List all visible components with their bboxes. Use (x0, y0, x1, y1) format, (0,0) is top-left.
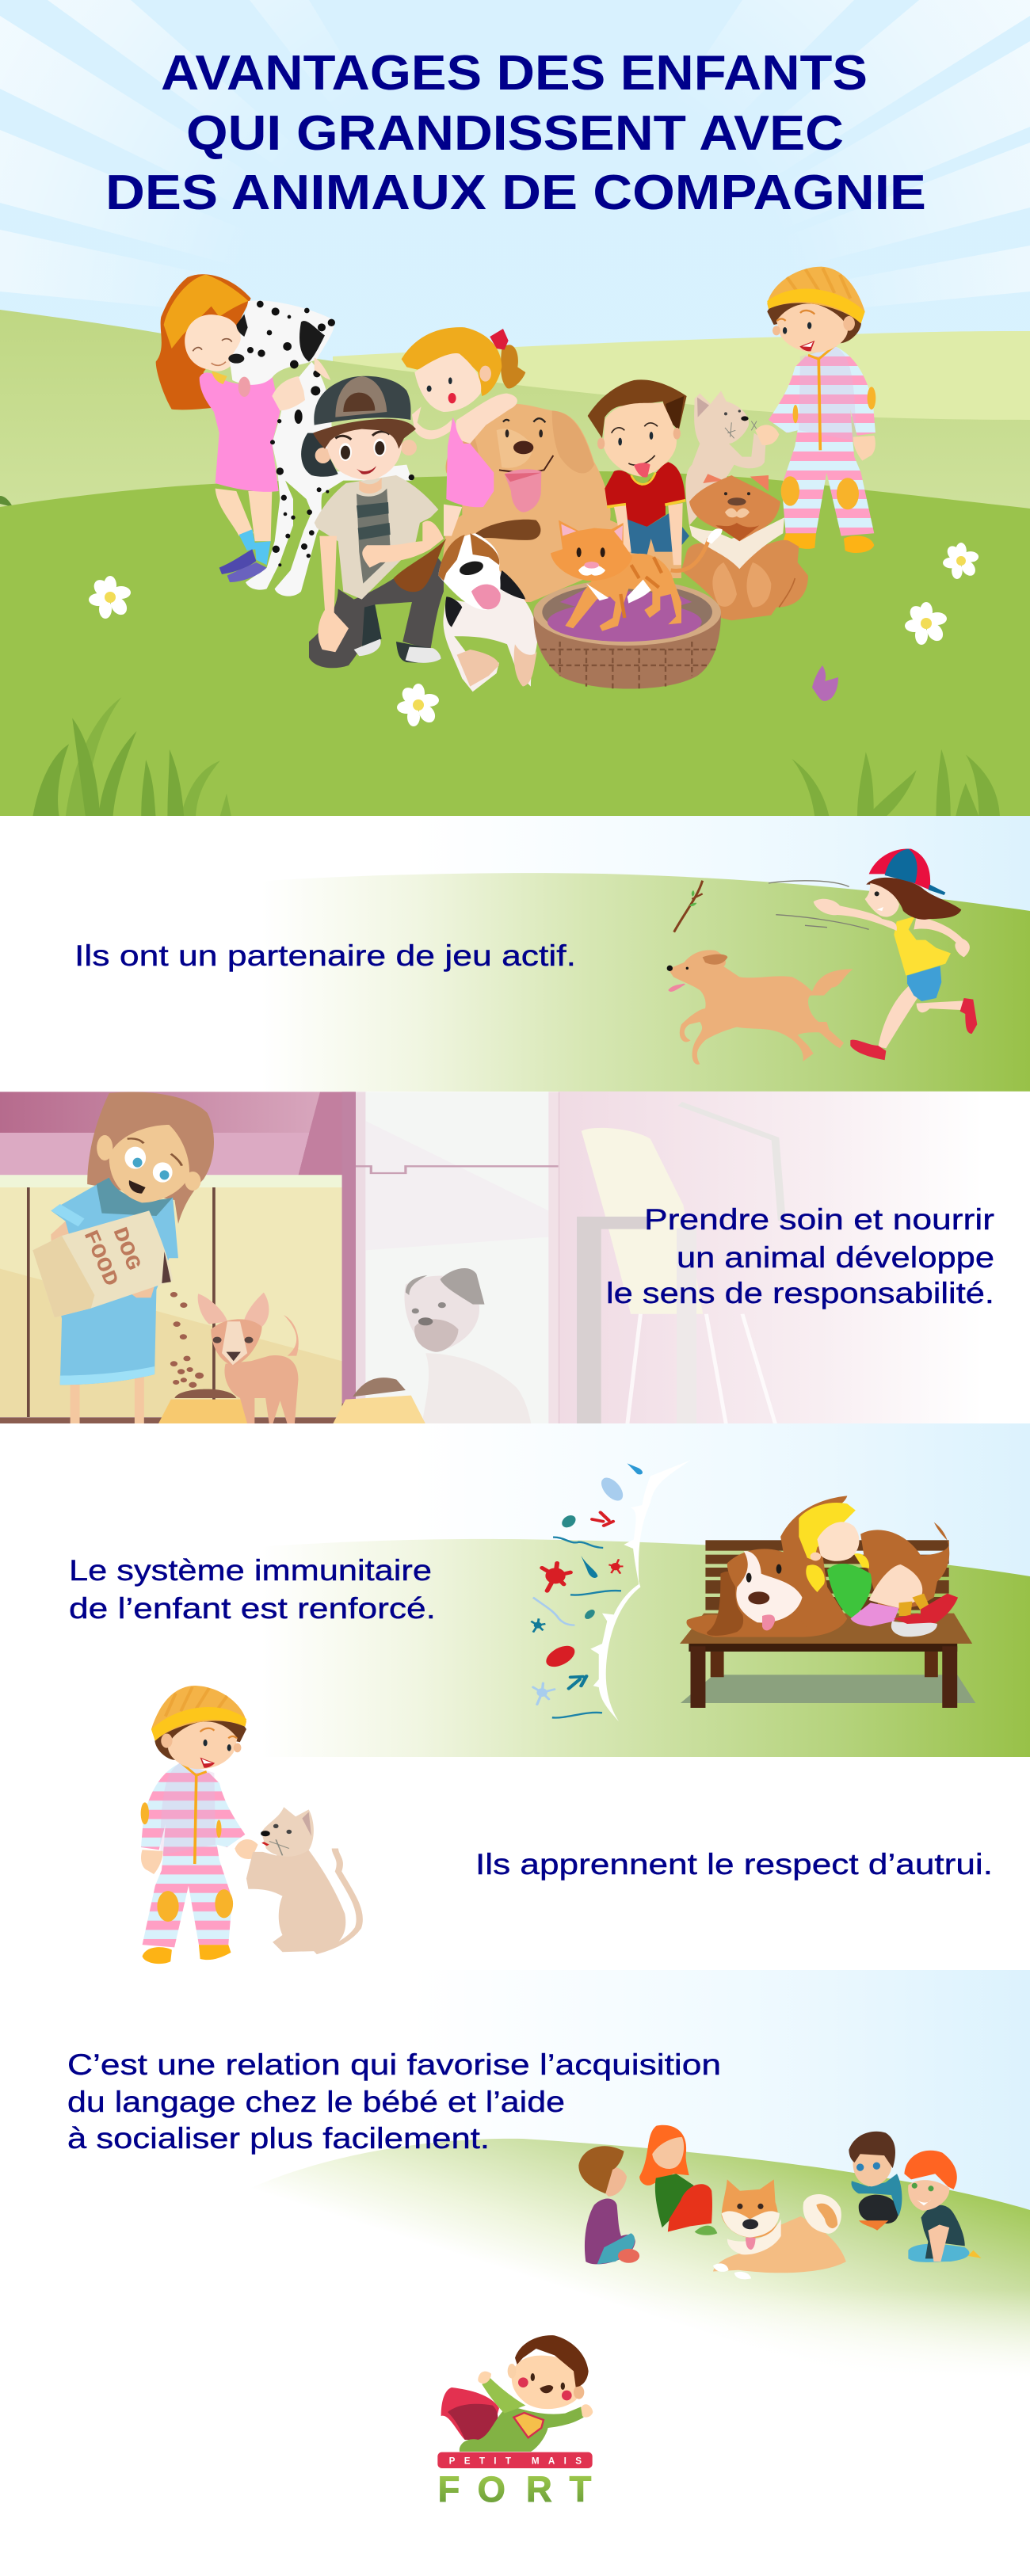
boy hair (313, 419, 416, 449)
text: language and socialising: du langage chez le bébé et l’aide (67, 2086, 565, 2118)
brown cat body (681, 540, 808, 620)
child (141, 1686, 258, 1964)
hands (478, 2372, 593, 2418)
text: dog food label: DOG (108, 1224, 146, 1274)
girl shoes (219, 549, 256, 574)
boy face (327, 425, 402, 480)
beagle body (443, 570, 537, 692)
girl (51, 1092, 214, 1424)
text: respect others: Ils apprennent le respect d’autrui. (475, 1848, 993, 1881)
beagle tongue (471, 585, 501, 609)
child in purple (578, 2146, 639, 2265)
chihuahua (198, 1293, 299, 1424)
ponytail girl face (414, 353, 481, 412)
text: immune system (69, 1554, 436, 1625)
illustration: child with cat (141, 1686, 360, 1964)
title: QUI GRANDISSENT AVEC (186, 106, 844, 161)
curly-haired child (904, 2151, 982, 2262)
face (512, 2356, 581, 2409)
cabinets (0, 1187, 342, 1417)
boy with blue scarf (849, 2132, 902, 2231)
icon: daisies (89, 543, 978, 726)
ponytail girl pony (501, 345, 525, 389)
wordmark: FORT (438, 2469, 592, 2509)
text: care and responsibility (606, 1203, 994, 1309)
illustration: four children and shiba (578, 2125, 982, 2279)
beige cat (685, 391, 766, 525)
ponytail girl arm over dog (456, 394, 517, 444)
panel: language section background (0, 1970, 1030, 2376)
lamp (680, 1103, 782, 1221)
beagle raised ear (473, 520, 540, 540)
girl face (185, 314, 242, 372)
ponytail girl dress (446, 417, 494, 507)
hair (515, 2335, 589, 2387)
beagle floppy ear (394, 539, 446, 592)
brown cat ears (703, 474, 769, 491)
ribbon (490, 329, 509, 350)
girl dress (200, 372, 280, 492)
badge text: PETIT MAIS (449, 2456, 582, 2466)
dog (668, 950, 853, 1065)
dog food bag (32, 1210, 173, 1317)
text: dog food label (78, 1224, 146, 1290)
dog head (727, 1549, 803, 1624)
badge (437, 2452, 593, 2468)
boy ears (315, 448, 331, 463)
dog ear (707, 1572, 743, 1636)
girl shorts (907, 966, 941, 1001)
brown cat mane (689, 517, 784, 569)
ponytail girl hair (402, 327, 502, 396)
bowls of kibble (158, 1378, 425, 1424)
icon: butterfly (812, 665, 838, 701)
boy face (604, 402, 677, 477)
panel: active play section background (0, 816, 1030, 1092)
orange cat tail (671, 539, 709, 571)
pyjama child (755, 267, 876, 553)
stick (674, 881, 703, 932)
cape (441, 2387, 499, 2440)
boy arms (614, 503, 683, 565)
germs (531, 1463, 643, 1717)
girl legs and dress (827, 1564, 872, 1618)
girl cap (869, 848, 930, 890)
body (460, 2406, 584, 2452)
title (105, 46, 926, 220)
logo: Petit mais Fort (437, 2335, 593, 2509)
pug (404, 1268, 531, 1424)
boy tongue (634, 463, 650, 478)
illustration: golden dog (441, 404, 681, 602)
orange cat head (551, 520, 632, 581)
girl socks (899, 1594, 929, 1616)
white barrier (590, 1460, 690, 1721)
girl hair (156, 274, 251, 410)
counter top (0, 1175, 342, 1187)
dalmatian spots (247, 301, 414, 566)
table column (577, 1217, 647, 1423)
text: care and responsibility: un animal développe (677, 1241, 994, 1274)
bench seat (680, 1614, 972, 1644)
brown cat head (689, 475, 780, 541)
girl hair highlight (164, 275, 248, 349)
girl shoes (850, 1040, 886, 1060)
girl shoes (921, 1594, 958, 1624)
girl arms (814, 899, 897, 931)
girl legs (216, 489, 272, 541)
boy cap brim (301, 433, 338, 477)
text: language and socialising (67, 2048, 721, 2155)
girl hair (866, 878, 961, 920)
dalmatian body (246, 362, 412, 596)
girl legs (878, 986, 964, 1048)
panel: immune system section background (0, 1423, 1030, 1757)
bench shadow (681, 1675, 975, 1703)
girl face (865, 883, 899, 917)
boy jeans (626, 513, 689, 554)
orange cat body (565, 554, 681, 631)
illustration: shield and germs (531, 1460, 975, 1721)
text: care and responsibility: le sens de responsabilité. (606, 1277, 994, 1309)
tongue (505, 469, 541, 513)
chair (582, 1128, 703, 1314)
illustration: girl hugging dalmatian (156, 274, 414, 596)
dog body (686, 1496, 847, 1637)
fridge (356, 1092, 367, 1424)
boy cap (314, 376, 410, 425)
girl top (894, 916, 951, 976)
basket (533, 612, 721, 689)
boy shoes (396, 642, 441, 663)
illustration: girl throwing stick to dog (667, 848, 977, 1065)
boy striped tee (357, 489, 391, 584)
text: immune system: Le système immunitaire (69, 1554, 432, 1587)
title: AVANTAGES DES ENFANTS (161, 46, 868, 101)
icon: grass tuft left (32, 697, 231, 816)
ponytail girl legs (444, 505, 462, 536)
dog tail and back (860, 1522, 949, 1614)
chest badge (513, 2413, 544, 2437)
text: language and socialising: C’est une relation qui favorise l’acquisition (67, 2048, 721, 2081)
bench front legs (690, 1646, 957, 1708)
cat (246, 1807, 360, 1953)
girl face (817, 1522, 859, 1561)
girl hand (272, 376, 305, 410)
wall lower band (0, 1133, 309, 1175)
text: care and responsibility: Prendre soin et nourrir (644, 1203, 994, 1236)
pillar (342, 1092, 356, 1404)
boy arms (319, 536, 349, 652)
basket cushion (547, 602, 702, 642)
bench back legs (711, 1652, 938, 1677)
text: language and socialising: à socialiser plus facilement. (67, 2122, 490, 2155)
ponytail girl arm (412, 406, 452, 440)
boy hair (588, 379, 687, 438)
illustration: boy, cats, basket and pyjama child (533, 267, 876, 691)
arm (482, 2378, 525, 2414)
red-haired girl (639, 2125, 717, 2235)
title: DES ANIMAUX DE COMPAGNIE (105, 166, 926, 220)
panel: hero background (0, 0, 1030, 816)
text: immune system: de l’enfant est renforcé. (69, 1592, 436, 1625)
panel: kitchen scene (0, 1092, 570, 1424)
dalmatian head (230, 300, 334, 385)
panel: faded room right side (559, 1092, 1030, 1424)
panel: respect section background (0, 1757, 1030, 1970)
girl socks (239, 529, 271, 565)
wall top band (0, 1092, 320, 1133)
girl hair (799, 1503, 856, 1560)
illustration: boy with cap and girl with ponytail (301, 327, 540, 692)
text: active play partner: Ils ont un partenaire de jeu actif. (74, 939, 576, 972)
bench backrest (705, 1540, 949, 1610)
motion lines (769, 881, 869, 929)
skirting (0, 1417, 342, 1424)
boy jacket (315, 475, 438, 600)
beagle head (438, 533, 501, 610)
icon: grass tuft right (792, 749, 1000, 816)
text: dog food label: FOOD (78, 1226, 123, 1290)
boy pants (309, 552, 444, 668)
boy shirt (605, 462, 685, 527)
shiba (713, 2179, 846, 2279)
falling kibble (170, 1292, 204, 1388)
